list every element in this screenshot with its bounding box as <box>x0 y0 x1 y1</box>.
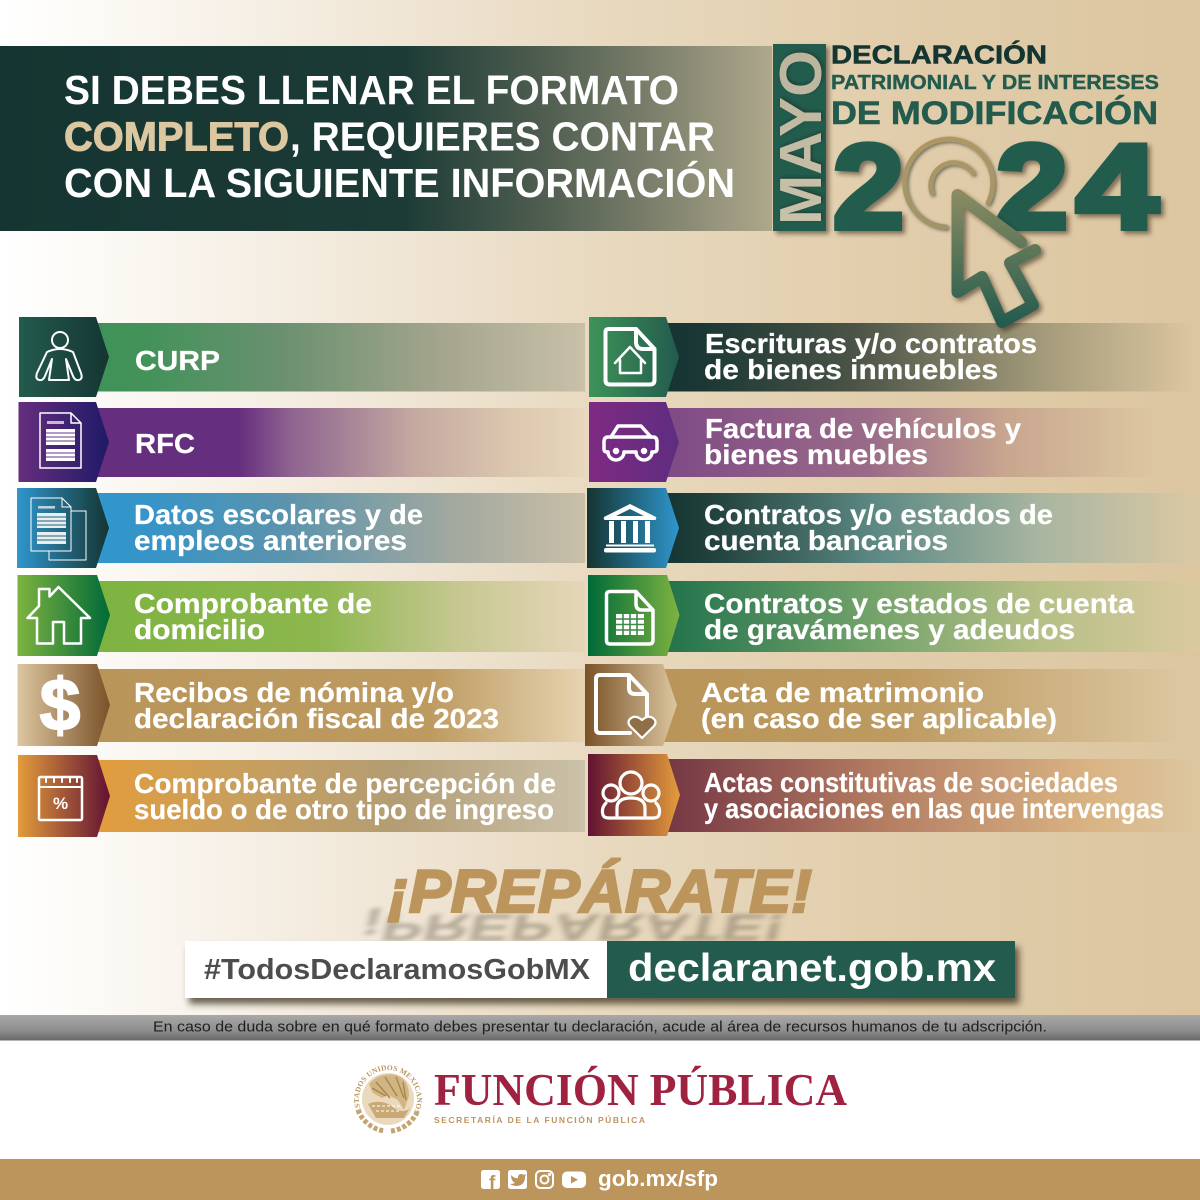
heading: prepárate: ¡PREPÁRATE! <box>388 858 812 925</box>
icon: facebook: f <box>489 1173 496 1194</box>
icon: person <box>36 332 82 380</box>
row: contratos de gravámenes <box>588 575 1200 656</box>
icon: instagram <box>536 1171 553 1188</box>
row: comprobante de percepción: Comprobante de percepción de <box>134 768 556 799</box>
year 2024: 2 <box>996 120 1068 254</box>
icon: calendar percent: % <box>53 794 68 813</box>
logo heading <box>831 40 1159 131</box>
icon: calendar percent <box>39 777 82 820</box>
row: contratos de gravámenes: Contratos y estados de cuenta <box>704 588 1134 619</box>
logo: función pública: FUNCIÓN PÚBLICA <box>434 1064 847 1115</box>
row: comprobante de domicilio: Comprobante de <box>134 588 372 619</box>
year 2024 <box>833 120 1158 254</box>
row: factura de vehículos: bienes muebles <box>704 439 928 470</box>
mayo vertical tag: MAYO <box>768 50 834 225</box>
icon: twitter <box>508 1170 527 1189</box>
row: comprobante de percepción <box>18 755 585 837</box>
row: CURP <box>19 317 585 397</box>
row: recibos de nómina: declaración fiscal de 2023 <box>134 703 499 734</box>
row: factura de vehículos: Factura de vehículos y <box>705 413 1021 444</box>
logo heading: DECLARACIÓN <box>831 40 1047 70</box>
row: datos escolares <box>17 488 585 568</box>
icon: document <box>40 413 81 468</box>
website: gob.mx/sfp: gob.mx/sfp <box>598 1166 718 1191</box>
heading: prepárate: ¡PREPÁRATE! <box>348 906 796 949</box>
header banner: CON LA SIGUIENTE INFORMACIÓN <box>64 160 735 206</box>
logo: función pública: SECRETARÍA DE LA FUNCIÓN PÚBLICA <box>434 1114 645 1125</box>
header banner: SI DEBES LLENAR EL FORMATO <box>64 67 679 113</box>
row: datos escolares: Datos escolares y de <box>134 499 423 530</box>
logo heading: DE MODIFICACIÓN <box>831 94 1158 131</box>
row: factura de vehículos <box>589 402 1200 482</box>
row: comprobante de percepción: sueldo o de otro tipo de ingreso <box>134 794 554 825</box>
white footer <box>0 1040 1200 1159</box>
row: comprobante de domicilio: domicilio <box>134 614 265 645</box>
icon: facebook <box>481 1170 500 1194</box>
icon: group of people <box>602 772 660 818</box>
year 2024: 2 <box>833 120 904 254</box>
heading: prepárate <box>348 858 812 949</box>
call to action: hashtag and website <box>185 941 1015 998</box>
row: contratos bancarios: cuenta bancarios <box>704 525 948 556</box>
icon: cursor arrow <box>958 195 1035 322</box>
row: escrituras: Escrituras y/o contratos <box>705 328 1037 359</box>
logo heading: PATRIMONIAL Y DE INTERESES <box>831 71 1159 94</box>
row: contratos de gravámenes: de gravámenes y adeudos <box>704 614 1075 645</box>
row: acta de matrimonio <box>585 664 1200 746</box>
icon: document with heart <box>596 675 656 738</box>
row: RFC: RFC <box>135 428 195 459</box>
icon: two documents <box>31 498 86 560</box>
row: CURP: CURP <box>135 345 220 376</box>
header banner: , REQUIERES CONTAR <box>290 114 715 160</box>
year 2024: 4 <box>1076 120 1158 254</box>
row: acta de matrimonio: (en caso de ser aplicable) <box>701 703 1057 734</box>
row: actas constitutivas: y asociaciones en las que intervengas <box>704 793 1164 824</box>
note band <box>0 1015 1200 1040</box>
row: contratos bancarios: Contratos y/o estados de <box>704 499 1053 530</box>
website: declaranet.gob.mx <box>628 947 996 990</box>
row: datos escolares: empleos anteriores <box>134 525 407 556</box>
icon: national seal <box>354 1065 422 1134</box>
icon: bank <box>604 504 656 552</box>
row: escrituras <box>589 317 1200 397</box>
icon: document with house <box>606 329 654 384</box>
row: recibos de nómina: Recibos de nómina y/o <box>134 677 454 708</box>
icon: dollar sign: $ <box>40 665 80 746</box>
header banner <box>0 46 772 231</box>
row: acta de matrimonio: Acta de matrimonio <box>701 677 984 708</box>
row: actas constitutivas <box>588 754 1200 836</box>
row: recibos de nómina <box>18 664 585 746</box>
row: comprobante de domicilio <box>18 575 585 656</box>
icon: national seal: ESTADOS UNIDOS MEXICANOS <box>354 1065 422 1112</box>
icon: click rings <box>905 139 993 227</box>
header banner: COMPLETO <box>64 114 289 160</box>
icon: house <box>28 587 90 644</box>
icon: car <box>604 426 657 460</box>
hashtag: #TodosDeclaramosGobMX <box>204 954 591 986</box>
gold social bar <box>0 1159 1200 1200</box>
row: actas constitutivas: Actas constitutivas de sociedades <box>704 767 1118 798</box>
icon: youtube <box>562 1172 586 1188</box>
website <box>607 941 1015 998</box>
row: RFC <box>18 402 585 482</box>
row: escrituras: de bienes inmuebles <box>704 354 998 385</box>
note band: En caso de duda sobre en qué formato debes presentar tu declaración, acude al área de recursos humanos de tu adscripción. <box>153 1018 1047 1036</box>
campaign logo: declaración 2024 <box>768 40 1159 322</box>
icon: document with table <box>606 592 653 644</box>
row: contratos bancarios <box>587 488 1200 568</box>
